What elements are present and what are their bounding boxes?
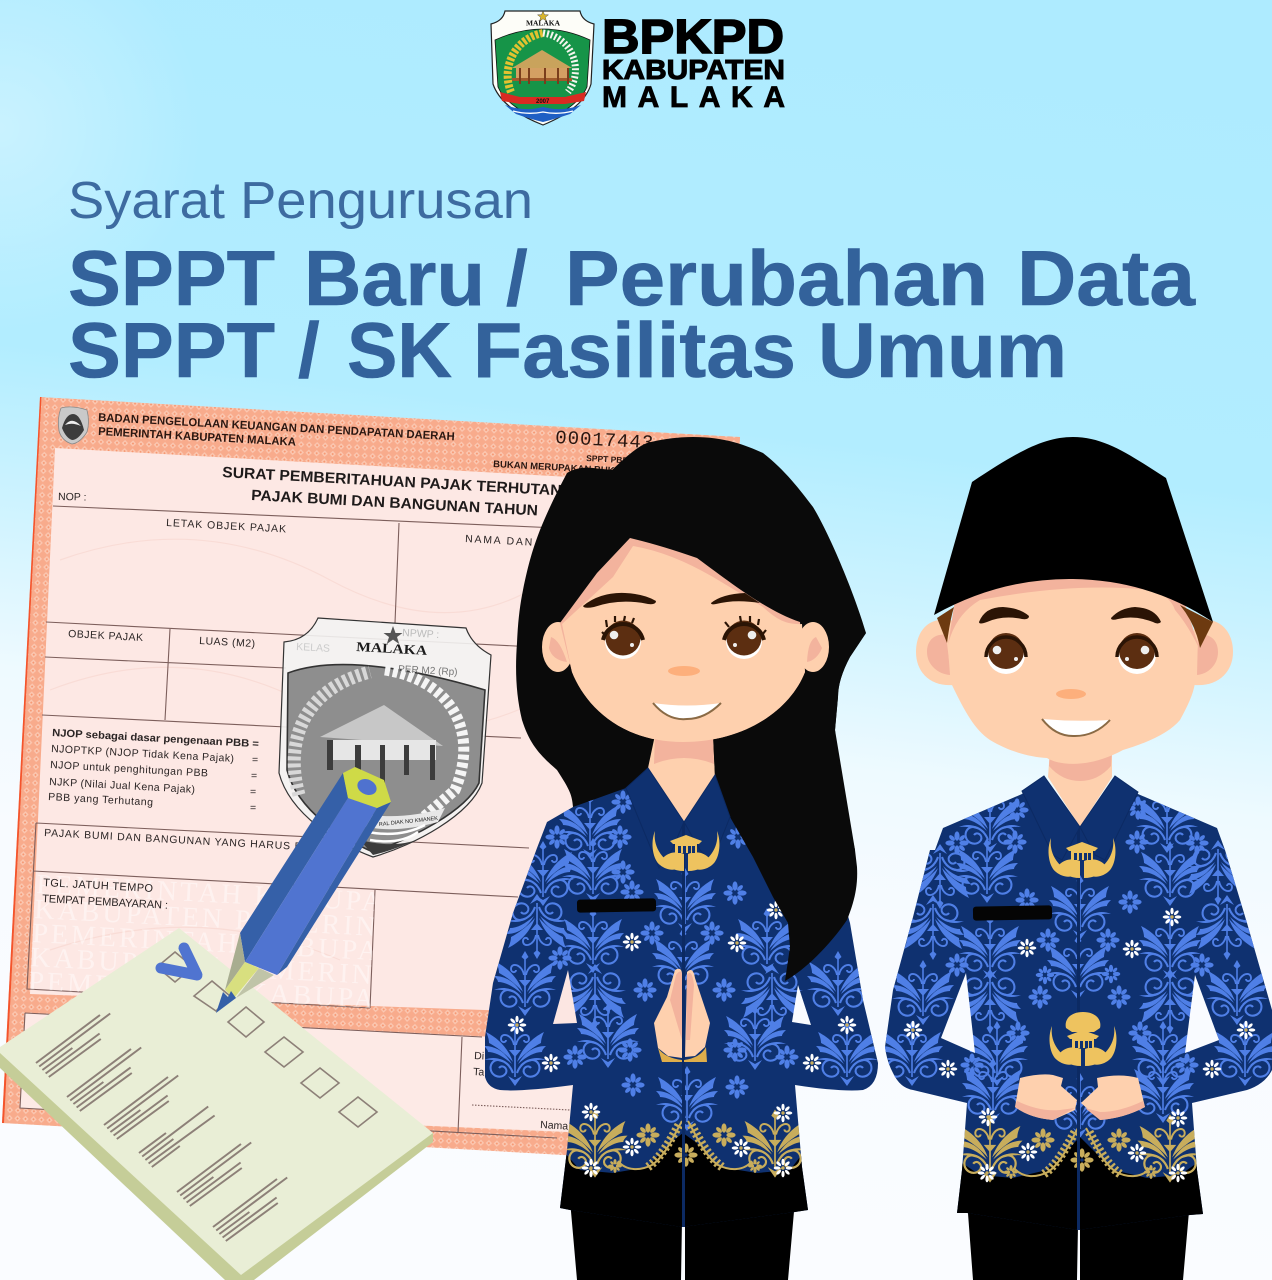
woman praying hands — [654, 969, 710, 1062]
man black peci cap — [934, 437, 1213, 622]
title line 2: SK — [347, 306, 452, 394]
icon: Malaka coat of arms shield: 2007 — [536, 99, 550, 105]
logo text: BPKPD: BPKPD — [602, 11, 784, 64]
document field labels — [42, 491, 569, 1133]
document header text: BADAN PENGELOLAAN KEUANGAN DAN PENDAPATAN DAERAH — [98, 412, 455, 443]
man white flowers — [904, 908, 1255, 1078]
watermark seal: grey Malaka shield: PER M2 (Rp) — [398, 664, 458, 678]
woman emblem — [653, 831, 719, 871]
document watermark text: KABUPATEN PEMERINTAH — [30, 942, 440, 994]
man neck — [1048, 750, 1112, 827]
document watermark text — [30, 875, 375, 1008]
man batik shirt — [880, 770, 1272, 1240]
checkboxes — [157, 952, 377, 1127]
man black hem — [957, 1137, 1203, 1230]
document field labels: TEMPAT PEMBAYARAN : — [42, 893, 168, 912]
man eyebrows — [979, 607, 1161, 624]
document NJOP list: = — [250, 786, 256, 798]
document table lines — [20, 506, 570, 1138]
document NJOP list: = — [251, 770, 257, 782]
watermark seal: grey Malaka shield: KELAS — [296, 641, 330, 655]
logo text: MALAKA: MALAKA — [602, 81, 785, 114]
document field labels: PAJAK BUMI DAN BANGUNAN YANG HARUS DI — [44, 827, 306, 853]
woman head — [542, 538, 829, 742]
watermark seal: grey Malaka shield: MALAKA — [356, 639, 428, 658]
document header text: SPPT PBB — [586, 453, 629, 465]
document field labels: LETAK OBJEK PAJAK — [166, 517, 286, 535]
title line 2: Umum — [818, 306, 1067, 394]
man smile — [1042, 719, 1110, 736]
title line 1: Perubahan — [565, 234, 988, 322]
man eyes — [987, 636, 1025, 674]
woman smile — [653, 703, 721, 719]
woman hair back — [516, 437, 866, 870]
document field labels: Nama — [540, 1119, 569, 1133]
paper face — [0, 928, 433, 1275]
document title text: SURAT PEMBERITAHUAN PAJAK TERHUTANG — [222, 464, 574, 500]
document NJOP list — [48, 727, 259, 814]
paper edge — [0, 1053, 433, 1280]
logo text: KABUPATEN: KABUPATEN — [602, 54, 785, 85]
icon: blue pencil — [216, 767, 391, 1013]
checklist paper — [0, 928, 433, 1280]
title line 2: / — [298, 306, 320, 394]
man gold border ornaments — [957, 1114, 1203, 1183]
man chest emblem with tree — [1050, 1012, 1116, 1066]
man name tag — [973, 905, 1052, 921]
text lines on checklist — [36, 1014, 287, 1241]
document paper with orange security border — [2, 397, 740, 1164]
watermark seal: grey Malaka shield: RAL DIAK NO KMANEK — [379, 816, 439, 828]
heading: subtitle: Syarat Pengurusan — [68, 172, 533, 230]
woman pants — [570, 1200, 795, 1280]
logo: BPKPD Kabupaten Malaka — [491, 11, 785, 125]
document NJOP list: = — [252, 754, 258, 766]
woman arm gaps — [553, 970, 811, 1025]
document watermark text: PEMERINTAH KABUPATEN — [28, 966, 438, 1018]
woman eyes — [605, 623, 641, 659]
document field labels: NOP : — [58, 491, 87, 503]
watermark seal: grey Malaka shield: NPWP : — [402, 627, 440, 641]
woman batik shirt — [485, 788, 878, 1227]
woman eyebrows — [583, 593, 760, 608]
document NJOP list: = — [250, 802, 256, 814]
title line 1: Data — [1017, 234, 1196, 322]
watermark seal: grey Malaka shield — [279, 618, 491, 857]
document field labels: LUAS (M2) — [199, 635, 255, 650]
man brown sideburns — [937, 607, 954, 643]
document watermark text: PEMERINTAH KABUPATEN — [32, 918, 442, 970]
title line 1: / — [506, 234, 528, 322]
document field labels: TGL. JATUH TEMPO — [43, 877, 154, 895]
document header text: PEMERINTAH KABUPATEN MALAKA — [98, 426, 296, 449]
title line 2: Fasilitas — [473, 306, 796, 394]
heading: title — [68, 234, 1196, 394]
man folded hands — [1015, 1074, 1145, 1120]
man nose — [1056, 689, 1086, 699]
document NJOP list: NJOPTKP (NJOP Tidak Kena Pajak) — [51, 743, 234, 765]
man placket — [1077, 827, 1080, 1230]
panel: SPPT tax document — [2, 397, 740, 1164]
woman damask pattern — [484, 790, 878, 1131]
document header text: BUKAN MERUPAKAN BUKTI — [493, 459, 623, 477]
document NJOP list: NJOP untuk penghitungan PBB — [50, 759, 208, 780]
document NJOP list: NJKP (Nilai Jual Kena Pajak) — [49, 776, 195, 796]
man collar emblem — [1049, 838, 1115, 878]
icon: Malaka coat of arms shield: MALAKA — [526, 20, 561, 28]
document title text — [222, 464, 574, 520]
man head — [916, 437, 1233, 764]
man damask pattern — [881, 788, 1272, 1138]
document NJOP list: NJOP sebagai dasar pengenaan PBB = — [52, 727, 259, 750]
man pants — [967, 1200, 1190, 1280]
document field labels: Di — [474, 1050, 484, 1063]
character: woman in civil-servant batik — [480, 437, 880, 1280]
document header text — [98, 412, 654, 477]
woman nose — [668, 666, 700, 676]
title line 1: Baru — [304, 234, 485, 322]
woman gold border ornaments — [562, 1109, 808, 1178]
character: man in civil-servant batik — [880, 437, 1272, 1280]
document field labels: Ta — [473, 1066, 485, 1079]
document field labels: NAMA DAN A — [465, 533, 545, 549]
title line 2: SPPT — [68, 306, 275, 394]
woman placket — [682, 822, 685, 1227]
document title text: PAJAK BUMI DAN BANGUNAN TAHUN — [251, 487, 538, 520]
icon: check mark — [161, 948, 197, 975]
title line 1: SPPT — [68, 234, 275, 322]
document seal icon — [58, 407, 88, 444]
document header text: 00017443 — [555, 427, 654, 454]
title line 2 — [68, 306, 1067, 394]
woman collar — [626, 768, 730, 868]
document field labels: OBJEK PAJAK — [68, 628, 143, 644]
document watermark text: PEMERINTAH KABUPATEN KABUPATEN — [36, 869, 646, 932]
icon: Malaka coat of arms shield — [491, 11, 594, 125]
woman black hem — [560, 1134, 808, 1227]
woman name tag — [577, 898, 656, 913]
man arm gaps — [941, 973, 1219, 1053]
document NJOP list: PBB yang Terhutang — [48, 791, 153, 809]
title line 1 — [68, 234, 1196, 322]
document watermark text: KABUPATEN PEMERINTAH KABUPATEN — [34, 894, 644, 957]
man collar — [1022, 776, 1138, 860]
woman hair lock — [713, 600, 866, 981]
woman white flowers — [508, 901, 856, 1072]
woman neck — [648, 735, 715, 822]
